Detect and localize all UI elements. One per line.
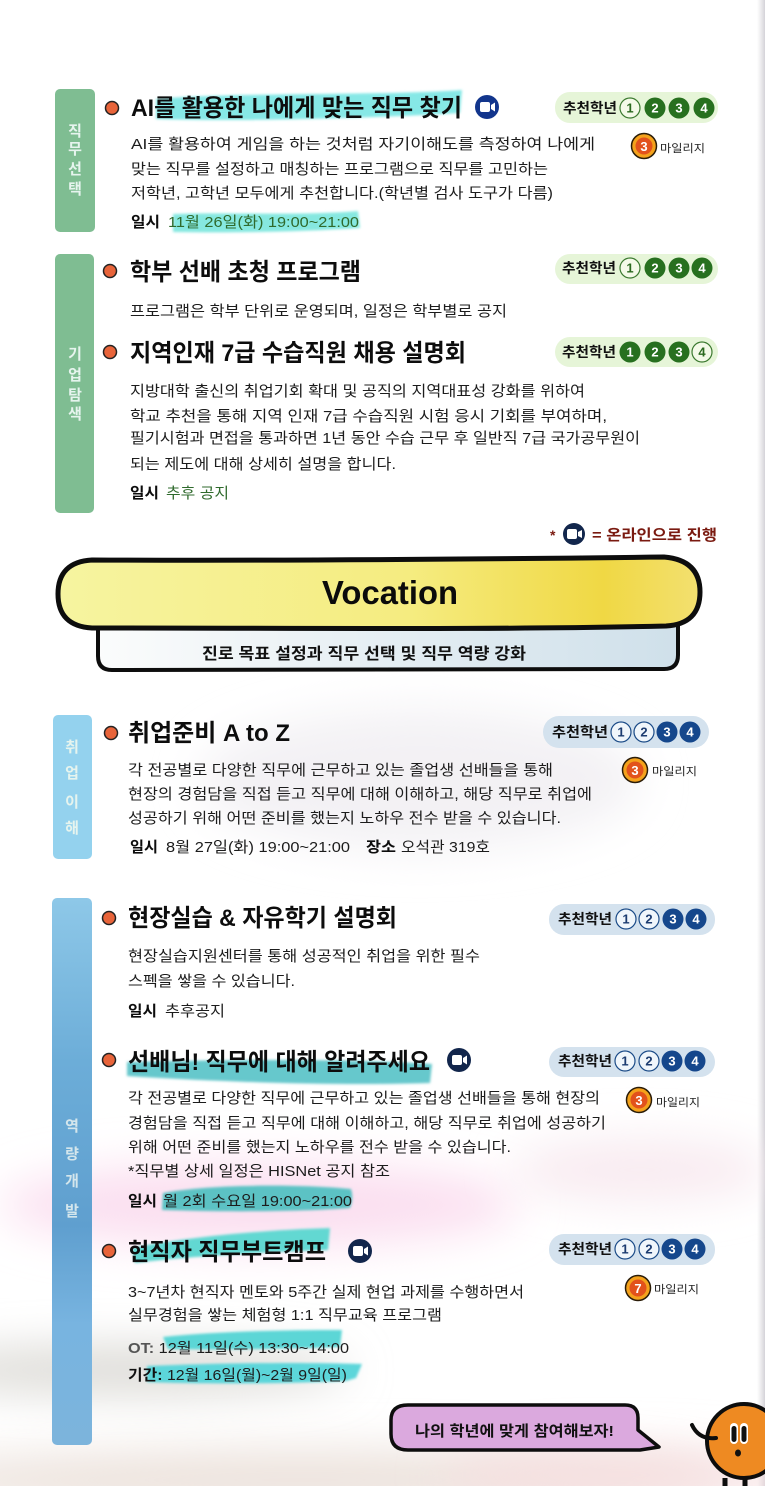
legend: online note: * bbox=[550, 527, 556, 543]
grade badge bbox=[555, 337, 718, 367]
description: 각 전공별로 다양한 직무에 근무하고 있는 졸업생 선배들을 통해 bbox=[128, 762, 553, 779]
side tab: job understanding bbox=[53, 715, 92, 859]
grade badge: 3 bbox=[668, 1242, 676, 1256]
grade badge: 3 bbox=[669, 912, 677, 926]
highlight: mentor title bbox=[127, 1060, 432, 1084]
date: 11월 26일(화) 19:00~21:00 bbox=[168, 214, 359, 231]
mileage badge: 3 bbox=[640, 139, 648, 154]
bullet bbox=[102, 1054, 116, 1066]
grade badge: 4 bbox=[691, 1242, 699, 1256]
side tab: job selection: 무 bbox=[68, 141, 82, 158]
side tab label bbox=[65, 1118, 79, 1220]
mileage badge: 마일리지 bbox=[652, 764, 697, 778]
subtitle box bbox=[98, 622, 678, 670]
mileage badge bbox=[632, 134, 705, 158]
grade badge: 추천학년 bbox=[558, 911, 612, 927]
icon: online video bbox=[447, 1048, 471, 1072]
legend: online note: = 온라인으로 진행 bbox=[592, 527, 717, 544]
mileage badge: 마일리지 bbox=[660, 141, 705, 155]
grade badge: 추천학년 bbox=[558, 1053, 612, 1069]
grade badge: 추천학년 bbox=[562, 344, 616, 360]
grade badge: 추천학년 bbox=[563, 100, 617, 116]
description: 지방대학 출신의 취업기회 확대 및 공직의 지역대표성 강화를 위하여 bbox=[130, 383, 585, 400]
description: 성공하기 위해 어떤 준비를 했는지 노하우 전수 받을 수 있습니다. bbox=[128, 810, 561, 827]
grade badge: 1 bbox=[626, 260, 634, 276]
bullet bbox=[104, 346, 116, 358]
grade badge: 2 bbox=[651, 344, 659, 360]
side tab: competency development bbox=[52, 898, 92, 1445]
bullet bbox=[102, 912, 116, 924]
description: 스펙을 쌓을 수 있습니다. bbox=[128, 973, 295, 990]
schedule bbox=[128, 1340, 349, 1384]
mileage badge bbox=[626, 1276, 699, 1300]
side tab: job selection: 택 bbox=[68, 181, 82, 198]
grade badge: 3 bbox=[675, 344, 683, 360]
description: 현장의 경험담을 직접 듣고 직무에 대해 이해하고, 해당 직무로 취업에 bbox=[128, 786, 592, 803]
grade badge: 1 bbox=[621, 1054, 629, 1068]
mileage badge: 3 bbox=[631, 763, 639, 778]
grade badge bbox=[543, 716, 709, 748]
description: 되는 제도에 대해 상세히 설명을 합니다. bbox=[130, 456, 396, 473]
grade badge: 2 bbox=[645, 1054, 653, 1068]
highlight: date bbox=[173, 211, 360, 232]
grade badge: 3 bbox=[668, 1054, 676, 1068]
description: 프로그램은 학부 단위로 운영되며, 일정은 학부별로 공지 bbox=[130, 303, 507, 320]
side tab: company exploration: 색 bbox=[68, 406, 82, 423]
date: 추후 공지 bbox=[166, 485, 229, 502]
grade badge: 2 bbox=[645, 912, 653, 926]
grade badge: 2 bbox=[651, 260, 659, 276]
description: 맞는 직무를 설정하고 매칭하는 프로그램으로 직무를 고민하는 bbox=[131, 161, 548, 178]
highlight: bootcamp title bbox=[132, 1228, 330, 1263]
panel: job understanding bbox=[53, 715, 709, 859]
side tab: company exploration: 업 bbox=[68, 367, 82, 384]
icon: online video bbox=[348, 1239, 372, 1263]
bullet bbox=[102, 1244, 116, 1258]
description: 실무경험을 쌓는 체험형 1:1 직무교육 프로그램 bbox=[128, 1307, 442, 1324]
date bbox=[130, 485, 229, 502]
date: 추후공지 bbox=[165, 1003, 225, 1020]
grade badge bbox=[549, 904, 715, 935]
description: 학교 추천을 통해 지역 인재 7급 수습직원 시험 응시 기회를 부여하며, bbox=[130, 408, 607, 425]
description: 경험담을 직접 듣고 직무에 대해 이해하고, 해당 직무로 취업에 성공하기 bbox=[128, 1115, 606, 1132]
heading: senior mentoring: 선배님! 직무에 대해 알려주세요 bbox=[128, 1049, 430, 1076]
side tab label: 발 bbox=[65, 1203, 79, 1220]
side tab label: 량 bbox=[65, 1146, 79, 1163]
side tab: job selection bbox=[55, 89, 95, 232]
description: 필기시험과 면접을 통과하면 1년 동안 수습 근무 후 일반직 7급 국가공무원이 bbox=[130, 430, 640, 447]
grade badge: 3 bbox=[675, 100, 683, 116]
schedule: OT: 12월 11일(수) 13:30~14:00 bbox=[128, 1340, 349, 1357]
grade badge: 추천학년 bbox=[558, 1241, 612, 1257]
side tab: company exploration: 기 bbox=[68, 346, 82, 363]
grade badge: 4 bbox=[686, 724, 694, 740]
mileage badge: 7 bbox=[634, 1281, 642, 1296]
grade badge: 1 bbox=[617, 724, 625, 740]
date bbox=[128, 1003, 225, 1020]
heading: regional talent: 지역인재 7급 수습직원 채용 설명회 bbox=[130, 340, 466, 367]
highlight: bootcamp schedule bbox=[147, 1330, 362, 1383]
grade badge: 1 bbox=[622, 912, 630, 926]
grade badge bbox=[549, 1234, 715, 1265]
side tab label: 개 bbox=[65, 1173, 79, 1190]
legend: online note bbox=[550, 523, 717, 545]
side tab: company exploration bbox=[55, 254, 94, 513]
description: *직무별 상세 일정은 HISNet 공지 참조 bbox=[128, 1163, 390, 1180]
panel: company exploration bbox=[55, 254, 718, 513]
grade badge: 1 bbox=[626, 344, 634, 360]
mileage badge bbox=[626, 1088, 700, 1112]
description: 3~7년차 현직자 멘토와 5주간 실제 현업 과제를 수행하면서 bbox=[128, 1284, 524, 1301]
date: 일시 bbox=[128, 1193, 157, 1210]
description bbox=[131, 136, 595, 202]
bullet bbox=[104, 264, 116, 278]
date: 일시 bbox=[131, 214, 160, 231]
heading: AI job finder: AI를 활용한 나에게 맞는 직무 찾기 bbox=[131, 95, 462, 122]
description: 저학년, 고학년 모두에게 추천합니다.(학년별 검사 도구가 다름) bbox=[131, 185, 553, 202]
heading: bootcamp: 현직자 직무부트캠프 bbox=[128, 1239, 326, 1266]
mileage badge: 3 bbox=[635, 1093, 643, 1108]
date and place: 장소 bbox=[366, 839, 396, 856]
grade badge bbox=[555, 92, 718, 123]
highlight: mentor date bbox=[162, 1186, 352, 1211]
title pill: Vocation bbox=[322, 574, 458, 611]
heading: field practice: 현장실습 & 자유학기 설명회 bbox=[128, 905, 397, 932]
side tab: job understanding: 해 bbox=[65, 820, 79, 837]
panel: job selection bbox=[55, 89, 718, 232]
grade badge bbox=[549, 1047, 715, 1077]
description bbox=[130, 383, 640, 473]
heading: alumni program: 학부 선배 초청 프로그램 bbox=[130, 259, 361, 286]
date: 일시 bbox=[128, 1003, 157, 1020]
bullet bbox=[106, 102, 118, 114]
grade badge: 3 bbox=[663, 724, 671, 740]
heading: job prep A to Z: 취업준비 A to Z bbox=[128, 720, 290, 747]
grade badge: 1 bbox=[626, 100, 634, 116]
grade badge: 2 bbox=[640, 724, 648, 740]
date and place: 일시 bbox=[130, 839, 158, 856]
side tab: job understanding: 이 bbox=[65, 794, 79, 811]
mileage badge: 마일리지 bbox=[654, 1282, 699, 1296]
grade badge: 4 bbox=[700, 100, 708, 116]
grade badge: 1 bbox=[621, 1242, 629, 1256]
side tab: job understanding: 업 bbox=[65, 765, 79, 782]
grade badge: 4 bbox=[698, 260, 706, 276]
description bbox=[128, 948, 480, 990]
date: 일시 bbox=[130, 485, 159, 502]
side tab: job understanding: 취 bbox=[65, 739, 79, 756]
description: 현장실습지원센터를 통해 성공적인 취업을 위한 필수 bbox=[128, 948, 480, 965]
subtitle box: 진로 목표 설정과 직무 선택 및 직무 역량 강화 bbox=[202, 645, 526, 663]
grade badge: 4 bbox=[691, 1054, 699, 1068]
date: 월 2회 수요일 19:00~21:00 bbox=[163, 1193, 352, 1210]
bullet bbox=[104, 726, 118, 740]
banner: Vocation bbox=[58, 557, 700, 670]
mileage badge bbox=[622, 758, 697, 782]
schedule: 기간: 12월 16일(월)~2월 9일(일) bbox=[128, 1367, 347, 1384]
description bbox=[128, 1090, 606, 1180]
callout: speech bubble bbox=[391, 1405, 659, 1450]
grade badge bbox=[555, 254, 718, 284]
grade badge: 2 bbox=[651, 100, 659, 116]
title pill bbox=[58, 557, 700, 628]
callout: speech bubble: 나의 학년에 맞게 참여해보자! bbox=[415, 1423, 614, 1440]
grade badge: 4 bbox=[692, 912, 700, 926]
description bbox=[128, 762, 592, 827]
date and place: 8월 27일(화) 19:00~21:00 bbox=[166, 839, 350, 856]
description bbox=[128, 1284, 524, 1324]
grade badge: 추천학년 bbox=[562, 260, 616, 276]
grade badge: 3 bbox=[675, 260, 683, 276]
icon: online video bbox=[475, 95, 499, 119]
description: AI를 활용하여 게임을 하는 것처럼 자기이해도를 측정하여 나에게 bbox=[131, 136, 595, 153]
icon: orange mascot bbox=[692, 1404, 765, 1486]
side tab label: 역 bbox=[65, 1118, 79, 1135]
date and place bbox=[130, 839, 490, 856]
mileage badge: 마일리지 bbox=[656, 1095, 700, 1109]
description: 각 전공별로 다양한 직무에 근무하고 있는 졸업생 선배들을 통해 현장의 bbox=[128, 1090, 600, 1107]
panel: competency development bbox=[52, 898, 715, 1445]
side tab: company exploration: 탐 bbox=[68, 387, 82, 404]
grade badge: 4 bbox=[698, 344, 706, 360]
side tab: job selection: 직 bbox=[68, 123, 82, 140]
side tab: job selection: 선 bbox=[68, 161, 82, 178]
date and place: 오석관 319호 bbox=[401, 839, 490, 856]
description: 위해 어떤 준비를 했는지 노하우를 전수 받을 수 있습니다. bbox=[128, 1139, 511, 1156]
grade badge: 2 bbox=[645, 1242, 653, 1256]
grade badge: 추천학년 bbox=[552, 724, 608, 740]
highlight: title bbox=[156, 90, 462, 120]
